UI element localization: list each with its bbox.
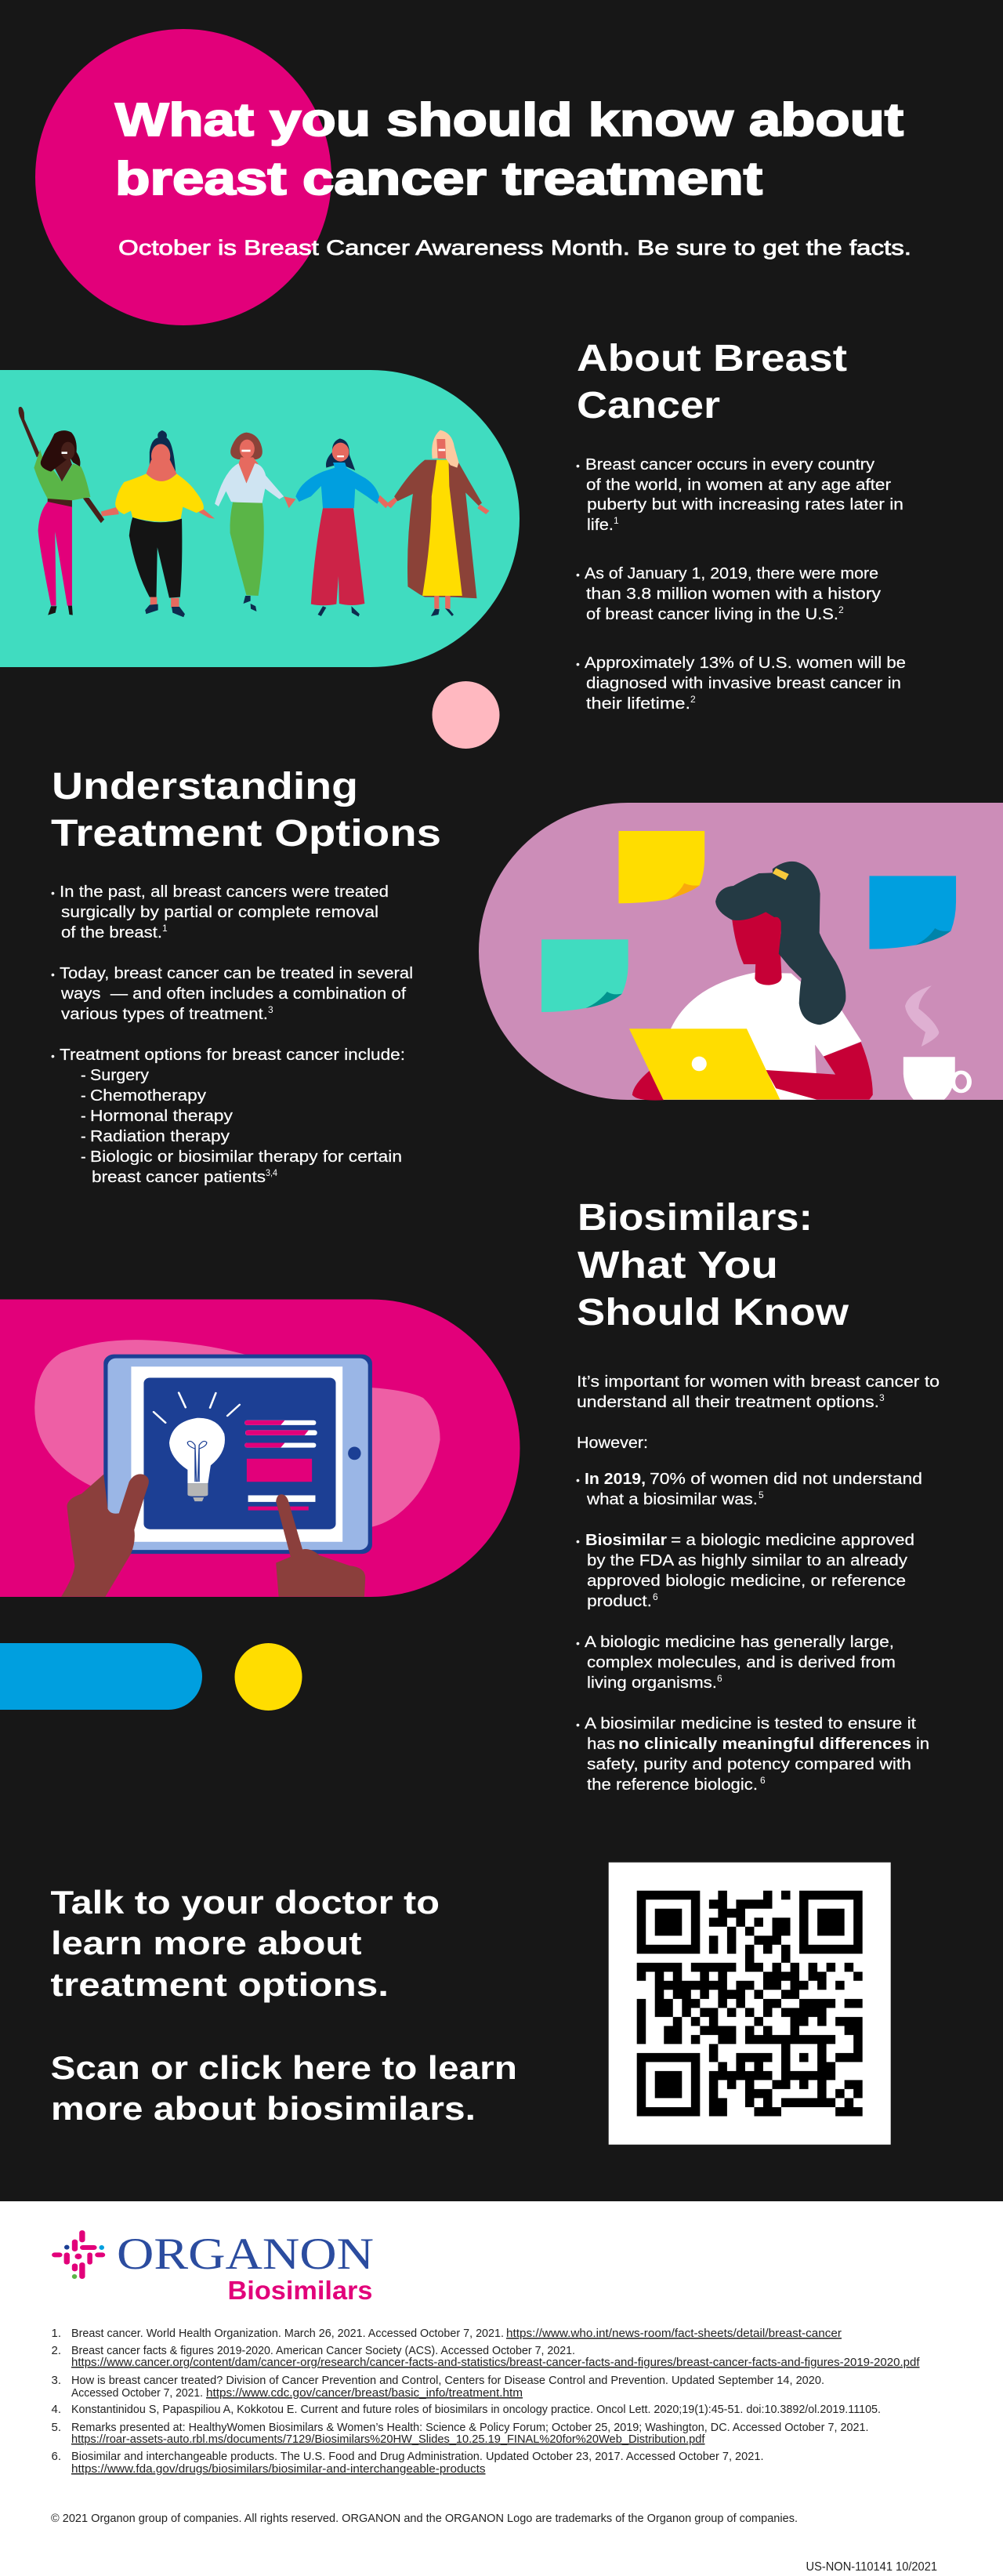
bullet: treatment list: breast cancer patients (92, 1169, 266, 1186)
bullet: treatment list (51, 1047, 405, 1186)
heading: understanding treatment options: Treatment Options (51, 813, 441, 854)
bullet: biosimilar definition: by the FDA as highly similar to an already (587, 1552, 907, 1569)
panel: footer (0, 2201, 1003, 2576)
woman 2 (101, 430, 215, 617)
bullet: survivors (576, 565, 881, 623)
bullet: occurrence: of the world, in women at any age after (586, 477, 891, 494)
bullet: occurrence: • (576, 459, 580, 472)
logo: Organon biosimilars: Biosimilars (227, 2276, 373, 2305)
title: What you should know about (115, 94, 903, 146)
references list: 4. (52, 2403, 61, 2416)
bullet: 2019 statistic: 5 (759, 1489, 764, 1500)
bullet: past surgery: surgically by partial or complete removal (61, 904, 378, 921)
bullet: biologic medicine: complex molecules, and is derived from (587, 1654, 896, 1671)
references list: 2. (52, 2344, 61, 2357)
logo: Organon biosimilars: ORGANON (117, 2230, 374, 2279)
bullet: biosimilar testing: A biosimilar medicine is tested to ensure it (585, 1715, 916, 1732)
woman 1 (19, 407, 104, 615)
references list: https://www.who.int/news-room/fact-sheets/detail/breast-cancer (506, 2327, 842, 2340)
call to action text: learn more about (51, 1925, 362, 1961)
icon: yellow sticky note (618, 831, 704, 903)
bullet: today combination: • (51, 968, 55, 981)
icon: coffee cup (903, 985, 969, 1100)
screen content bars (244, 1420, 317, 1511)
icon: tablet (103, 1355, 372, 1554)
bullet: treatment list: 3,4 (266, 1167, 277, 1178)
logo: Organon biosimilars (52, 2230, 374, 2305)
heading: understanding treatment options (51, 766, 441, 854)
references list: How is breast cancer treated? Division of Cancer Prevention and Control, Centers for Disease Control and Prevention. Updated September 14, 2020. (71, 2374, 824, 2387)
bullet: biologic medicine: 6 (717, 1673, 722, 1684)
bullet: lifetime risk: their lifetime. (586, 695, 690, 713)
bullet: treatment list: Biologic or biosimilar therapy for certain (90, 1148, 402, 1166)
icon: blue sticky note (869, 876, 956, 949)
bullet: past surgery: of the breast. (61, 924, 162, 942)
bullet: treatment list: - (81, 1067, 86, 1084)
bullet: lifetime risk: diagnosed with invasive breast cancer in (586, 675, 901, 692)
bullet: 2019 statistic: 70% of women did not understand (650, 1471, 922, 1488)
bullet: biosimilar testing: • (576, 1718, 580, 1731)
bullet: past surgery: • (51, 887, 55, 899)
decorative blue pill (0, 1643, 202, 1710)
bullet: occurrence: Breast cancer occurs in every country (585, 456, 874, 473)
decorative pink circle (433, 681, 500, 749)
panel: about breast cancer (576, 338, 906, 713)
panel: tablet illustration (0, 1300, 520, 1597)
bullet: occurrence: 1 (614, 515, 619, 526)
heading: biosimilars what you should know: Should Know (577, 1292, 849, 1333)
call to action text: Scan or click here to learn (50, 2049, 517, 2086)
bullet: today combination: various types of treatment. (61, 1006, 268, 1023)
bullet: biosimilar definition: Biosimilar (585, 1532, 667, 1549)
bullet: treatment list: - (81, 1128, 86, 1145)
header decorative magenta circle (35, 29, 331, 325)
bullet: treatment list: Hormonal therapy (90, 1108, 233, 1125)
references list: https://www.cancer.org/content/dam/cancer-org/research/cancer-facts-and-statistics/breast-cancer-facts-and-figures/breast-cancer-facts-and-figures-2019-2020.pdf (71, 2356, 920, 2369)
bullet: lifetime risk: 2 (690, 694, 696, 705)
bullet: treatment list: Radiation therapy (90, 1128, 230, 1145)
bullet: today combination (51, 965, 413, 1023)
bullet: treatment list: Surgery (90, 1067, 149, 1084)
bullet: biosimilar definition: 6 (653, 1591, 658, 1602)
bullet: 2019 statistic: In 2019, (585, 1471, 646, 1488)
bullet: treatment list: • (51, 1050, 55, 1062)
bullet: occurrence: life. (587, 517, 614, 534)
bullet: treatment list: - (81, 1087, 86, 1105)
bullet: survivors: As of January 1, 2019, there were more (585, 565, 878, 582)
call to action text (50, 1884, 517, 2127)
references list: 5. (52, 2421, 61, 2434)
bullet: biosimilar testing: safety, purity and potency compared with (587, 1756, 911, 1773)
references list: Remarks presented at: HealthyWomen Biosimilars & Women’s Health: Science & Policy Forum; October 25, 2019; Washington, DC. Accessed October 7, 2021. (71, 2421, 868, 2434)
bullet: lifetime risk (576, 655, 906, 713)
heading: biosimilars what you should know: Biosimilars: (578, 1197, 813, 1239)
references list: Breast cancer facts & figures 2019-2020. American Cancer Society (ACS). Accessed October 7, 2021. (71, 2344, 575, 2357)
bullet: biologic medicine (576, 1634, 896, 1692)
bullet: survivors: than 3.8 million women with a history (586, 586, 881, 603)
bullet: biosimilar testing: in (916, 1736, 929, 1753)
bullet: biosimilar testing: has (587, 1736, 615, 1753)
heading: understanding treatment options: Understanding (52, 766, 358, 807)
bullet: occurrence (576, 456, 903, 534)
bullet: biosimilar testing: the reference biologic. (587, 1776, 758, 1794)
QR code (609, 1863, 891, 2145)
icon: teal sticky note (541, 939, 628, 1012)
decorative yellow circle (235, 1643, 302, 1711)
bullet: biosimilar definition: product. (587, 1593, 652, 1610)
bullet: 2019 statistic: • (576, 1474, 580, 1486)
heading: biosimilars what you should know (577, 1197, 849, 1333)
bullet: biosimilar definition: • (576, 1535, 580, 1547)
woman at laptop (629, 862, 873, 1101)
bullet: past surgery (51, 883, 389, 942)
woman 5 (386, 430, 490, 616)
bullet: today combination: Today, breast cancer can be treated in several (60, 965, 413, 982)
intro text: understand all their treatment options. (577, 1394, 879, 1411)
references list: Konstantinidou S, Papaspiliou A, Kokkotou E. Current and future roles of biosimilars in oncology practice. Oncol Lett. 2020;19(1):45-51. doi:10.3892/ol.2019.11105. (71, 2403, 881, 2416)
intro text: 3 (879, 1392, 885, 1403)
references list: Accessed October 7, 2021. (71, 2386, 203, 2400)
intro text: However: (577, 1435, 648, 1452)
references list: 6. (52, 2450, 61, 2463)
bullet: treatment list: Treatment options for breast cancer include: (60, 1047, 405, 1064)
bullet: 2019 statistic (576, 1471, 922, 1508)
bullet: biologic medicine: A biologic medicine has generally large, (585, 1634, 894, 1651)
bullet: biosimilar definition (576, 1532, 914, 1610)
woman 3 (215, 433, 295, 611)
references list: Breast cancer. World Health Organization. March 26, 2021. Accessed October 7, 2021. (71, 2327, 504, 2340)
bullet: today combination: ways — and often includes a combination of (60, 985, 406, 1003)
bullet: survivors: 2 (838, 604, 844, 615)
bullet: survivors: • (576, 568, 580, 581)
heading: about breast cancer (577, 338, 847, 426)
icon: right hand (276, 1494, 365, 1597)
panel: woman at laptop illustration (479, 803, 1003, 1101)
woman 4 (295, 438, 389, 617)
bullet: past surgery: In the past, all breast cancers were treated (60, 883, 389, 901)
heading: biosimilars what you should know: What You (578, 1245, 778, 1286)
heading: about breast cancer: About Breast (577, 338, 847, 379)
bullet: biosimilar definition: approved biologic medicine, or reference (587, 1573, 906, 1590)
subtitle: October is Breast Cancer Awareness Month. Be sure to get the facts. (118, 236, 911, 259)
call to action text: Talk to your doctor to (50, 1884, 440, 1921)
references list: 3. (52, 2374, 61, 2387)
panel: biosimilars (576, 1197, 940, 1794)
bullet: lifetime risk: Approximately 13% of U.S. women will be (585, 655, 906, 672)
references list: Biosimilar and interchangeable products. The U.S. Food and Drug Administration. Updated October 23, 2017. Accessed October 7, 2021. (71, 2450, 763, 2463)
icon: left hand (61, 1474, 149, 1597)
references list: 1. (52, 2327, 61, 2340)
bullet: today combination: 3 (268, 1004, 273, 1015)
copyright: © 2021 Organon group of companies. All rights reserved. ORGANON and the ORGANON Logo are trademarks of the Organon group of companies. (51, 2512, 798, 2525)
panel: understanding treatment options (51, 766, 441, 1186)
heading: about breast cancer: Cancer (577, 385, 720, 426)
bullet: occurrence: puberty but with increasing rates later in (587, 496, 903, 513)
bullet: lifetime risk: • (576, 658, 580, 670)
call to action text: treatment options. (50, 1966, 389, 2003)
intro text: It’s important for women with breast cancer to (577, 1373, 940, 1391)
bullet: survivors: of breast cancer living in the U.S. (586, 606, 838, 623)
panel: women illustration (0, 370, 520, 667)
document code: US-NON-110141 10/2021 (806, 2560, 937, 2574)
bullet: 2019 statistic: what a biosimilar was. (586, 1491, 758, 1508)
title: breast cancer treatment (115, 153, 762, 205)
bullet: past surgery: 1 (162, 923, 168, 934)
bullet: biologic medicine: living organisms. (587, 1674, 717, 1692)
bullet: biologic medicine: • (576, 1637, 580, 1649)
bullet: biosimilar testing: no clinically meaningful differences (618, 1736, 911, 1753)
icon: light bulb (154, 1393, 240, 1501)
references list: https://www.cdc.gov/cancer/breast/basic_info/treatment.htm (206, 2386, 523, 2400)
title (115, 94, 903, 205)
bullet: treatment list: - (81, 1148, 86, 1166)
intro text (577, 1373, 940, 1452)
references list: https://www.fda.gov/drugs/biosimilars/biosimilar-and-interchangeable-products (71, 2462, 486, 2476)
call to action text: more about biosimilars. (51, 2090, 476, 2127)
bullet: biosimilar definition: = a biologic medicine approved (671, 1532, 914, 1549)
bullet: treatment list: - (81, 1108, 86, 1125)
references list: https://roar-assets-auto.rbl.ms/documents/7129/Biosimilars%20HW_Slides_10.25.19_FINAL%20for%20Web_Distribution.pdf (71, 2433, 705, 2446)
bullet: treatment list: Chemotherapy (90, 1087, 206, 1105)
bullet: biosimilar testing (576, 1715, 929, 1794)
bullet: biosimilar testing: 6 (760, 1775, 766, 1786)
references list (52, 2327, 920, 2476)
